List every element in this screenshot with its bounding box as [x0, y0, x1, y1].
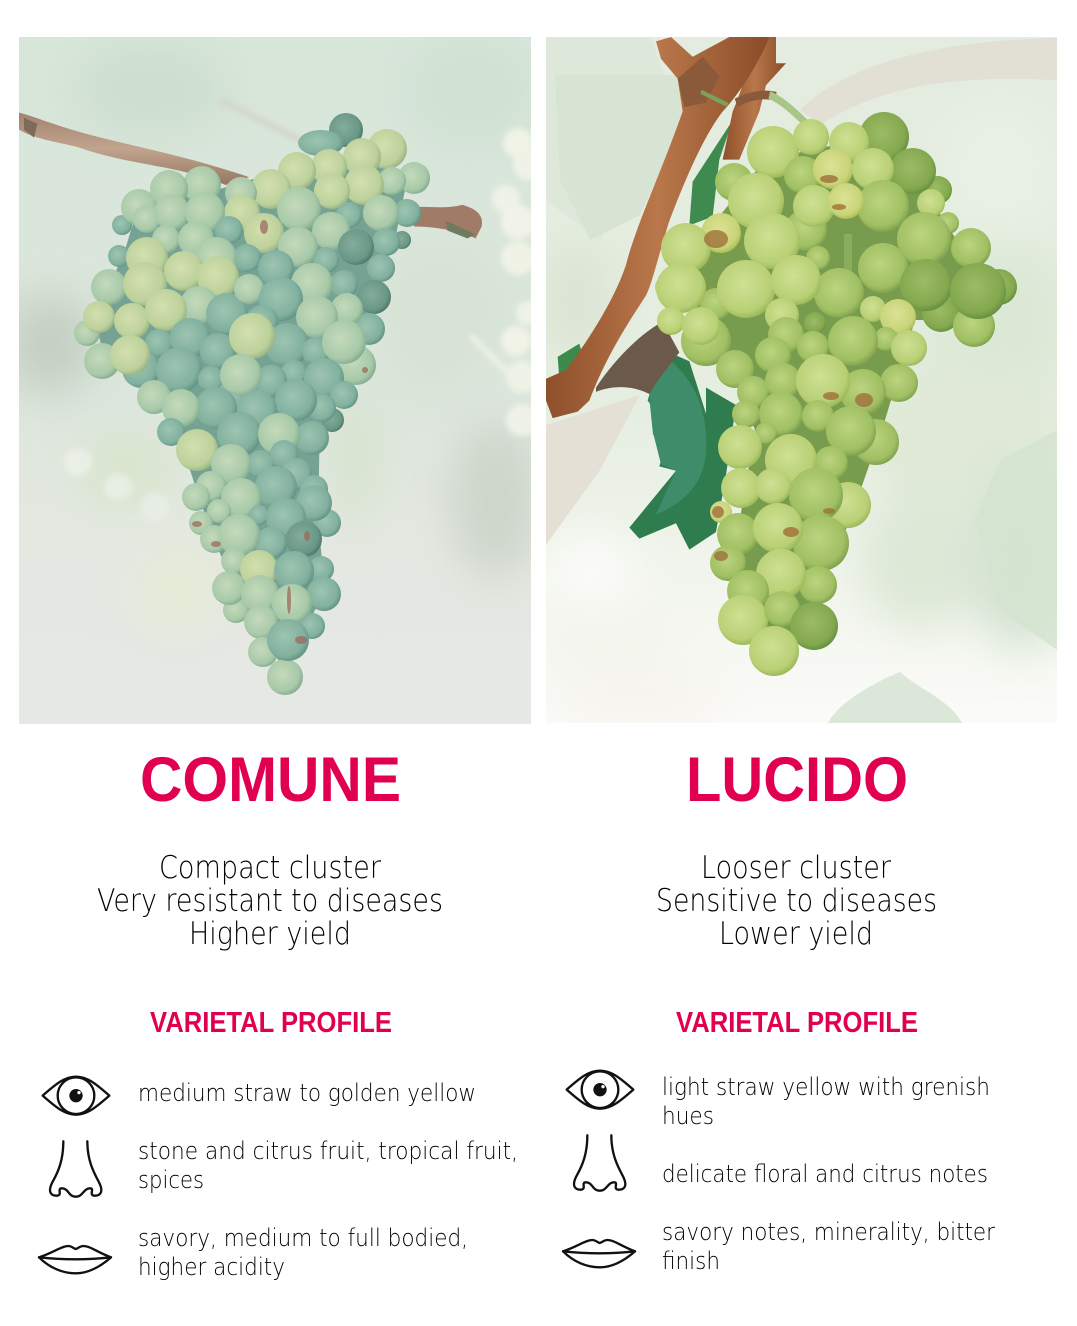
panel: comune photo — [5, 30, 543, 724]
icon: nose (lucido) — [574, 1135, 625, 1191]
text: lucido sight: light straw yellow with grenish — [662, 1073, 990, 1101]
heading: comune varietal profile: VARIETAL PROFILE — [150, 1007, 392, 1039]
title: lucido: LUCIDO — [686, 745, 908, 815]
text: lucido taste: finish — [662, 1247, 720, 1275]
text block: comune traits: Compact cluster — [159, 850, 381, 886]
text block: comune traits: Very resistant to diseases — [97, 883, 443, 919]
text: comune aroma — [138, 1137, 518, 1194]
title: comune: COMUNE — [140, 745, 401, 815]
vine stem: lucido — [546, 37, 806, 418]
text: lucido sight: hues — [662, 1102, 714, 1130]
text block: lucido traits: Lower yield — [719, 916, 873, 952]
panel: lucido photo — [535, 37, 1070, 723]
icon: lips (lucido) — [563, 1240, 635, 1267]
text: lucido sight — [662, 1073, 990, 1130]
text: comune taste — [138, 1224, 468, 1281]
grape cluster: comune — [74, 113, 430, 695]
icon: lips (comune) — [39, 1246, 111, 1273]
heading: lucido varietal profile: VARIETAL PROFILE — [676, 1007, 918, 1039]
text: comune aroma: spices — [138, 1166, 204, 1194]
text block: lucido traits: Looser cluster — [701, 850, 891, 886]
text block: comune traits: Higher yield — [189, 916, 351, 952]
icon: nose (comune) — [50, 1141, 101, 1197]
text: lucido taste — [662, 1218, 995, 1275]
vine stem: comune — [19, 113, 482, 238]
text: lucido aroma: delicate floral and citrus notes — [662, 1160, 988, 1188]
text: comune taste: higher acidity — [138, 1253, 285, 1281]
grape cluster: lucido — [655, 112, 1017, 676]
text: lucido taste: savory notes, minerality, bitter — [662, 1218, 995, 1246]
text: comune aroma: stone and citrus fruit, tropical fruit, — [138, 1137, 518, 1165]
text: comune sight: medium straw to golden yellow — [138, 1079, 476, 1107]
leaf: lucido — [558, 120, 736, 550]
text block: lucido traits — [656, 850, 937, 952]
text: comune taste: savory, medium to full bodied, — [138, 1224, 468, 1252]
text block: comune traits — [97, 850, 443, 952]
text block: lucido traits: Sensitive to diseases — [656, 883, 937, 919]
icon: eye (lucido) — [567, 1071, 633, 1109]
icon: eye (comune) — [43, 1077, 109, 1115]
